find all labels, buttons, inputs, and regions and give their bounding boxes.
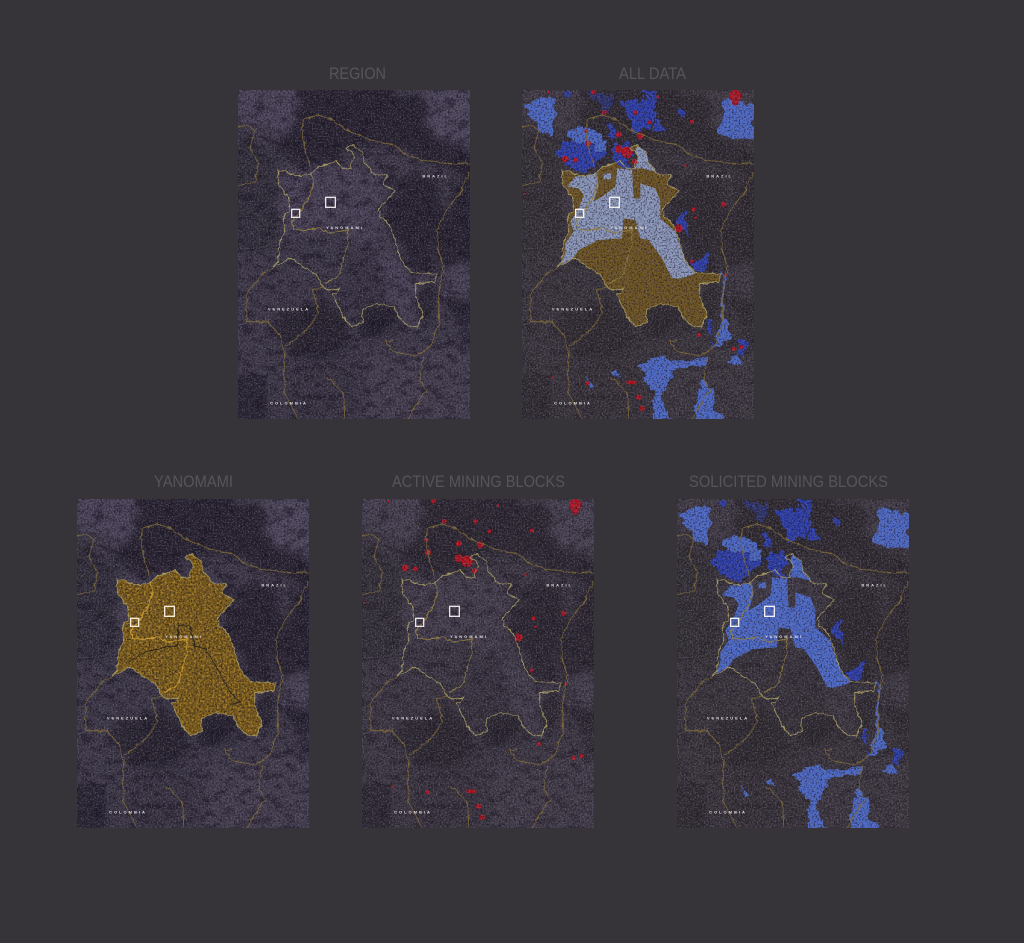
country and territory labels: VENEZUELA [707,716,749,721]
yanomami territory highlight [112,554,276,736]
active blocks [364,499,584,820]
map: yanomami [77,499,309,828]
muted tint [354,489,607,839]
country and territory labels: COLOMBIA [109,810,147,815]
map: all data [522,90,754,419]
yanomami outline [112,554,276,736]
stream texture [669,489,922,839]
country and territory labels: COLOMBIA [394,810,432,815]
yanomami outline [712,554,876,736]
title: region: REGION [329,65,386,83]
country and territory labels [707,583,888,815]
country and territory labels: VENEZUELA [268,307,310,312]
terrain base [69,489,322,839]
country and territory labels: BRAZIL [546,583,573,588]
yanomami outline [397,554,561,736]
dense solicited blocks [714,501,902,764]
yanomami outline [557,145,721,327]
border lines [677,524,909,828]
border lines [238,115,470,419]
title: active mining blocks: ACTIVE MINING BLOCKS [392,473,565,491]
solicited blocks outside territory [680,504,910,829]
muted tint [514,80,767,430]
study-area squares [576,197,619,217]
boundary between sectors [129,626,241,704]
title: solicited mining blocks: SOLICITED MINING BLOCKS [689,473,888,491]
country and territory labels: COLOMBIA [554,401,592,406]
map: active mining blocks [362,499,594,828]
country and territory labels: VENEZUELA [552,307,594,312]
terrain base [354,489,607,839]
country and territory labels [107,583,288,815]
solicited blocks inside territory [715,556,850,687]
stream texture [230,80,483,430]
yanomami outline [273,145,437,327]
country and territory labels: VENEZUELA [392,716,434,721]
solicited blocks outside territory [525,95,755,420]
study-area squares [292,197,335,217]
country and territory labels: YANOMAMI [450,634,488,639]
stream texture [514,80,767,430]
terrain base [514,80,767,430]
border lines [522,115,754,419]
highlight texture [114,554,276,736]
country and territory labels: COLOMBIA [709,810,747,815]
stream texture [354,489,607,839]
country and territory labels: YANOMAMI [326,225,364,230]
yanomami territory fill [557,145,721,327]
country and territory labels: BRAZIL [422,174,449,179]
terrain base [230,80,483,430]
country and territory labels [268,174,449,406]
title: all data: ALL DATA [619,65,686,83]
solicited blocks inside territory [560,147,695,278]
terrain base [669,489,922,839]
dense solicited blocks [559,92,747,355]
country and territory labels: YANOMAMI [765,634,803,639]
country and territory labels: VENEZUELA [107,716,149,721]
border lines [77,524,309,828]
country and territory labels: YANOMAMI [165,634,203,639]
map: region [238,90,470,419]
study-area squares [416,606,459,626]
title: yanomami: YANOMAMI [154,473,233,491]
country and territory labels: YANOMAMI [610,225,648,230]
country and territory labels [392,583,573,815]
border lines [362,524,594,828]
muted tint [669,489,922,839]
country and territory labels: BRAZIL [261,583,288,588]
active blocks [524,90,744,411]
inner river [131,582,187,692]
map: solicited mining blocks [677,499,909,828]
study-area squares [731,606,774,626]
country and territory labels: BRAZIL [861,583,888,588]
country and territory labels: BRAZIL [706,174,733,179]
country and territory labels [552,174,733,406]
study-area squares [131,606,174,626]
country and territory labels: COLOMBIA [270,401,308,406]
stream texture [69,489,322,839]
